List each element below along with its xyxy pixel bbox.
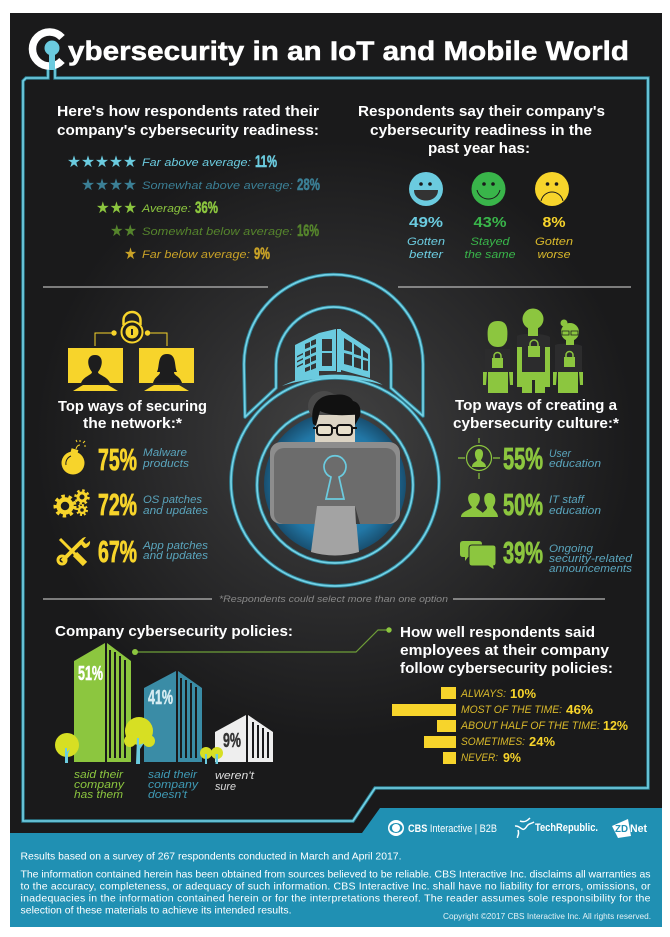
heading: past year: past year has: bbox=[428, 140, 530, 157]
footnote: *Respondents could select more than one option bbox=[219, 594, 448, 605]
rating: far below average: 9% bbox=[254, 244, 270, 263]
panel: cybersecurity culture bbox=[453, 308, 633, 575]
panel: readiness ratings bbox=[57, 103, 320, 263]
stat: stayed the same: the same bbox=[464, 249, 516, 261]
chart: building 9% bbox=[215, 715, 273, 762]
stat: IT staff education bbox=[503, 487, 601, 522]
logo: ZDNet: ZD bbox=[615, 824, 628, 835]
icon: happy face bbox=[409, 172, 443, 206]
stat: gotten better: Gotten bbox=[407, 236, 445, 248]
icon: staff group bbox=[483, 308, 583, 393]
icon: user target bbox=[458, 438, 500, 479]
icon: trees bbox=[55, 717, 223, 764]
rating: far below average bbox=[124, 244, 270, 263]
icon: neutral smile face bbox=[472, 172, 506, 206]
footer logos bbox=[388, 818, 647, 838]
stat: stayed the same: 43% bbox=[474, 214, 506, 231]
rating: average: ★★★ bbox=[96, 198, 137, 217]
panel: securing the network bbox=[55, 312, 209, 569]
panel: policy compliance bbox=[392, 624, 628, 765]
bar labels bbox=[460, 688, 600, 764]
person behind monitor bbox=[308, 391, 361, 444]
rating: somewhat above average: Somewhat above average: bbox=[142, 180, 293, 192]
heading: compliance: How well respondents said bbox=[400, 624, 595, 641]
stat: gotten better: better bbox=[409, 249, 445, 261]
heading: ratings bbox=[57, 103, 319, 139]
panel: company policies bbox=[55, 623, 293, 801]
rating: average: Average: bbox=[141, 203, 191, 215]
icon: wrench and screwdriver bbox=[58, 537, 90, 564]
heading: past year bbox=[358, 103, 605, 157]
stat: malware products: Malware bbox=[143, 447, 187, 459]
bar labels: SOMETIMES: bbox=[461, 736, 525, 748]
stat: gotten worse: Gotten bbox=[535, 236, 573, 248]
label: doesn't: doesn't bbox=[148, 789, 188, 801]
keyhole bbox=[324, 456, 346, 499]
circuit frame bbox=[23, 66, 648, 821]
stat: app patches: and updates bbox=[143, 550, 209, 562]
chart: building 41%: 41% bbox=[148, 687, 173, 709]
logo: circuit C bbox=[32, 32, 62, 70]
icon: two users bbox=[461, 493, 498, 517]
footer disclaimer: selection of these materials to achieve its intended results. bbox=[20, 904, 292, 916]
heading: compliance: employees at their company bbox=[400, 642, 610, 659]
rating: far above average: 11% bbox=[255, 152, 277, 171]
label: doesn't: company bbox=[148, 779, 200, 791]
chart: building 51% bbox=[74, 643, 131, 762]
label: doesn't: said their bbox=[148, 769, 198, 781]
logo: ZDNet: Net bbox=[630, 823, 647, 835]
footer disclaimer: The information contained herein has been obtained from sources believed to be reliable. CBS Interactive Inc. disclaims all warranties as bbox=[20, 868, 650, 880]
stat: gotten worse: worse bbox=[538, 249, 570, 261]
stat: gotten better bbox=[407, 214, 445, 261]
heading: securing network: Top ways of securing bbox=[58, 398, 207, 415]
stat: OS patches: and updates bbox=[143, 505, 209, 517]
bar values: 10% bbox=[510, 687, 536, 701]
stat: announcements: announcements bbox=[549, 563, 633, 575]
title: ybersecurity in an IoT and Mobile World bbox=[68, 36, 629, 66]
stat: app patches: 67% bbox=[98, 534, 137, 569]
copyright: Copyright ©2017 CBS Interactive Inc. All rights reserved. bbox=[443, 911, 651, 921]
bar values: 46% bbox=[566, 703, 593, 717]
stat: user education bbox=[503, 441, 601, 476]
stat: announcements: security-related bbox=[549, 553, 633, 565]
stat: OS patches: OS patches bbox=[143, 494, 203, 506]
footer disclaimer: inadequacies in the information contained herein or for the interpretations thereof. The reader assumes sole responsibility for the bbox=[20, 892, 651, 904]
rating: average: 36% bbox=[195, 198, 218, 217]
stat: malware products: products bbox=[142, 458, 190, 470]
stat: gotten worse bbox=[535, 214, 573, 261]
stat: announcements: Ongoing bbox=[549, 543, 594, 555]
icon: gears bbox=[55, 490, 88, 516]
icon: sad face bbox=[535, 172, 569, 206]
rating: far below average: ★ bbox=[124, 244, 137, 263]
bar values: 12% bbox=[603, 719, 628, 733]
footer survey note: Results based on a survey of 267 respondents conducted in March and April 2017. bbox=[20, 850, 402, 862]
heading: culture bbox=[453, 397, 619, 432]
bar labels: NEVER: bbox=[461, 752, 498, 764]
stat: IT staff education: 50% bbox=[503, 487, 543, 522]
rating: somewhat above average: ★★★★ bbox=[81, 175, 137, 194]
rating: somewhat below average: Somewhat below average: bbox=[142, 226, 293, 238]
label: weren't sure: sure bbox=[215, 781, 236, 793]
rating: somewhat below average: 16% bbox=[297, 221, 319, 240]
rating: somewhat below average bbox=[110, 221, 319, 240]
heading: past year: Respondents say their company's bbox=[358, 103, 605, 120]
logo: CBS Interactive: CBS Interactive | B2B bbox=[408, 823, 497, 835]
footer disclaimer: to the accuracy, completeness, or adequacy of such information. CBS Interactive Inc. shall have no liability for errors, omissions, or bbox=[20, 880, 651, 892]
bar values: 24% bbox=[529, 735, 555, 749]
stat: user education: 55% bbox=[503, 441, 543, 476]
stat: announcements bbox=[503, 535, 633, 575]
lock body rings bbox=[231, 378, 439, 586]
stat: OS patches bbox=[98, 487, 209, 522]
stat: stayed the same: Stayed bbox=[470, 236, 511, 248]
heading: ratings: company's cybersecurity readiness: bbox=[57, 122, 319, 139]
label: weren't sure bbox=[215, 770, 255, 793]
icon: building bbox=[282, 329, 383, 386]
panel: readiness change bbox=[358, 103, 605, 261]
heading: ratings: Here's how respondents rated their bbox=[57, 103, 319, 120]
stat: gotten worse: 8% bbox=[542, 214, 566, 231]
chart: building 41% bbox=[144, 671, 202, 762]
rating: far above average bbox=[67, 152, 277, 171]
rating: average bbox=[96, 198, 218, 217]
heading: securing network: the network:* bbox=[83, 415, 182, 432]
heading: policies: Company cybersecurity policies: bbox=[55, 623, 293, 640]
stat: announcements: 39% bbox=[503, 535, 543, 570]
heading: compliance bbox=[400, 624, 613, 677]
bar values bbox=[503, 687, 628, 765]
bar labels: MOST OF THE TIME: bbox=[461, 704, 562, 716]
heading: culture: Top ways of creating a bbox=[455, 397, 618, 414]
icon: speech bubbles bbox=[460, 541, 496, 570]
stat: malware products bbox=[98, 442, 190, 477]
chart: building 51%: 51% bbox=[78, 663, 103, 685]
rating: far above average: Far above average: bbox=[142, 157, 251, 169]
logo: TechRepublic: TechRepublic. bbox=[535, 822, 598, 834]
heading: compliance: follow cybersecurity policies: bbox=[400, 660, 613, 677]
logo: TechRepublic bbox=[515, 818, 598, 837]
stat: user education: User bbox=[549, 448, 572, 460]
footer disclaimer bbox=[20, 868, 651, 916]
stat: IT staff education: education bbox=[549, 505, 601, 517]
footer panel bbox=[10, 808, 662, 927]
stat: user education: education bbox=[549, 458, 601, 470]
heading: culture: cybersecurity culture:* bbox=[453, 415, 619, 432]
stat: IT staff education: IT staff bbox=[549, 494, 585, 506]
heading: past year: cybersecurity readiness in the bbox=[370, 122, 592, 139]
monitor bbox=[270, 442, 400, 556]
label: doesn't bbox=[148, 769, 200, 801]
stat: app patches: App patches bbox=[142, 540, 209, 552]
logo: ZDNet bbox=[612, 819, 647, 838]
stat: malware products: 75% bbox=[98, 442, 137, 477]
lock shackle outline bbox=[244, 274, 423, 417]
logo: CBS Interactive bbox=[388, 820, 497, 836]
chart: building 9%: 9% bbox=[223, 730, 241, 752]
label: has them: has them bbox=[74, 789, 123, 801]
bar labels: ABOUT HALF OF THE TIME: bbox=[460, 720, 600, 732]
connector line bbox=[132, 627, 392, 655]
stat: gotten better: 49% bbox=[409, 214, 443, 231]
blue disc bbox=[264, 413, 406, 555]
rating: far below average: Far below average: bbox=[142, 249, 250, 261]
label: has them bbox=[74, 769, 126, 801]
label: weren't sure: weren't bbox=[215, 770, 255, 782]
central padlock illustration bbox=[231, 274, 439, 586]
stat: OS patches: 72% bbox=[98, 487, 137, 522]
bar values: 9% bbox=[503, 751, 521, 765]
rating: far above average: ★★★★★ bbox=[67, 152, 137, 171]
rating: somewhat above average: 28% bbox=[297, 175, 320, 194]
bar labels: ALWAYS: bbox=[460, 688, 506, 700]
label: has them: said their bbox=[74, 769, 124, 781]
heading: securing network bbox=[58, 398, 207, 432]
label: has them: company bbox=[74, 779, 126, 791]
stat: stayed the same bbox=[464, 214, 516, 261]
rating: somewhat below average: ★★ bbox=[110, 221, 137, 240]
icon: networked users and padlock bbox=[68, 312, 194, 391]
bar chart bbox=[392, 687, 456, 764]
rating: somewhat above average bbox=[81, 175, 320, 194]
icon: bomb bbox=[62, 440, 86, 474]
stat: app patches bbox=[98, 534, 209, 569]
